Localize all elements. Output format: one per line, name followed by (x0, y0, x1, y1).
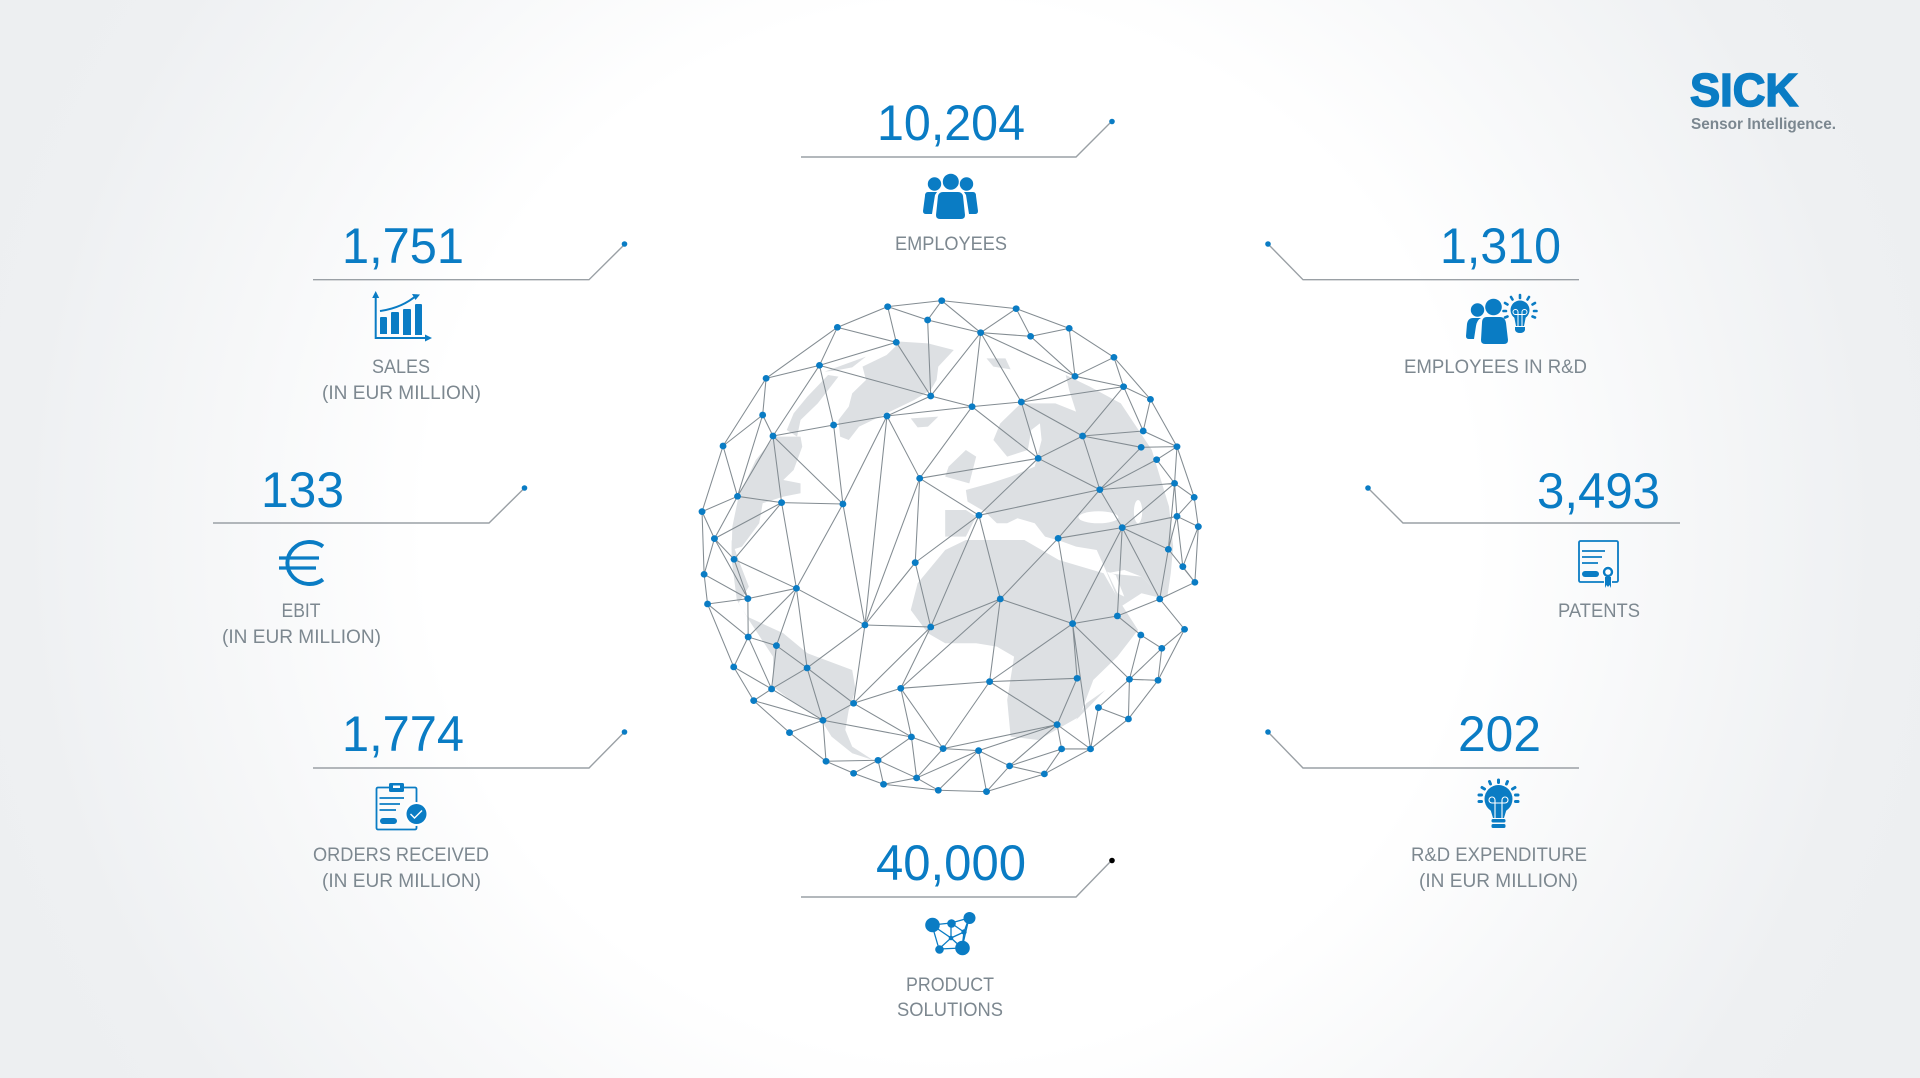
label: R&D EXPENDITURE (1411, 845, 1587, 866)
panel: employees in R&D (1265, 218, 1587, 378)
icon: light bulb (1479, 780, 1518, 828)
icon: euro sign (279, 542, 323, 584)
panel: EBIT (213, 462, 527, 648)
network mesh lines (702, 301, 1198, 627)
panel: sales (313, 218, 627, 404)
number: 10,204: 10,204 (877, 95, 1025, 151)
icon: people and light bulb (1466, 295, 1536, 344)
label: (IN EUR MILLION) (1419, 871, 1578, 892)
icon: clipboard with check mark (376, 783, 428, 830)
number: 202: 202 (1458, 706, 1541, 762)
number: 1,774: 1,774 (342, 706, 464, 762)
label: (IN EUR MILLION) (322, 383, 481, 404)
label (313, 845, 489, 892)
leader line (313, 241, 627, 280)
label: PRODUCT (906, 975, 994, 996)
label: SALES (372, 357, 430, 378)
leader line (801, 119, 1115, 157)
icon: patent certificate (1579, 541, 1618, 588)
logo: SICK Sensor Intelligence (1690, 64, 1836, 133)
leader line (213, 485, 527, 523)
icon: bar chart with rising arrow (372, 291, 432, 342)
label: (IN EUR MILLION) (222, 627, 381, 648)
inland seas (1078, 500, 1142, 597)
leader line (1265, 729, 1579, 768)
leader line (801, 858, 1115, 897)
number: 133: 133 (261, 462, 344, 518)
number: 40,000: 40,000 (876, 835, 1026, 891)
label: PATENTS (1558, 601, 1640, 622)
label (1411, 845, 1587, 892)
number: 1,310: 1,310 (1440, 218, 1561, 274)
label: ORDERS RECEIVED (313, 845, 489, 866)
leader line (1265, 241, 1579, 280)
label: EBIT (282, 601, 321, 622)
label: SOLUTIONS (897, 1000, 1003, 1021)
globe (699, 297, 1202, 795)
panel: employees (801, 95, 1115, 255)
label: EMPLOYEES (895, 234, 1007, 255)
label (222, 601, 381, 648)
world map continents (732, 342, 1173, 760)
icon: group of people (923, 174, 978, 219)
panel: orders received (313, 706, 627, 892)
leader line (313, 729, 627, 768)
leader line (1365, 485, 1680, 523)
label (322, 357, 481, 404)
number: 3,493: 3,493 (1537, 463, 1660, 519)
label: EMPLOYEES IN R&D (1404, 357, 1587, 378)
logo: SICK Sensor Intelligence: Sensor Intelligence. (1691, 116, 1836, 133)
panel: product solutions (801, 835, 1115, 1021)
logo: SICK Sensor Intelligence: SICK (1690, 64, 1798, 116)
icon: connected nodes (925, 912, 976, 955)
number: 1,751: 1,751 (342, 218, 464, 274)
label (897, 975, 1003, 1021)
panel: R&D expenditure (1265, 706, 1587, 892)
network nodes (699, 297, 1202, 795)
panel: patents (1365, 463, 1680, 622)
label: (IN EUR MILLION) (322, 871, 481, 892)
